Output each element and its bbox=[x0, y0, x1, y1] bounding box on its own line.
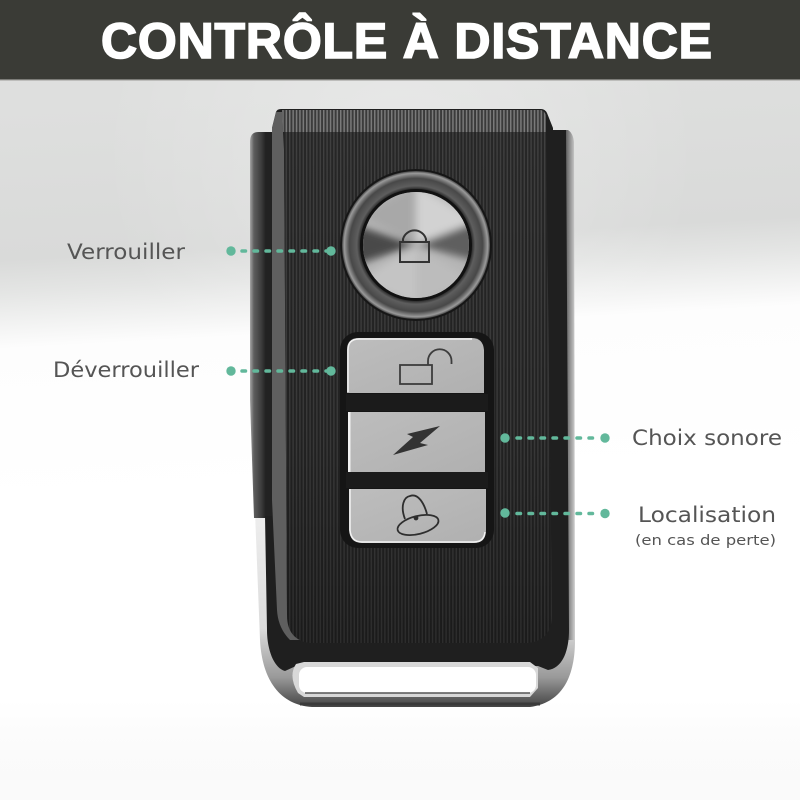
icon: lightning bolt bbox=[393, 426, 440, 455]
bar bbox=[346, 472, 488, 488]
icon: padlock open bbox=[400, 349, 452, 384]
metal disc bbox=[363, 192, 469, 298]
shell left bevel bbox=[272, 112, 300, 640]
remote control bbox=[250, 109, 575, 707]
callout: Choix sonore bbox=[500, 426, 782, 451]
callout: Choix sonore: Choix sonore bbox=[632, 426, 782, 451]
bell button bbox=[349, 489, 486, 543]
round button bbox=[340, 169, 492, 321]
callout: Localisation: Localisation bbox=[638, 503, 776, 528]
sound button bbox=[348, 412, 485, 472]
icon: bell bbox=[395, 495, 441, 539]
face lower shading bbox=[284, 132, 552, 643]
three-button block bbox=[340, 332, 494, 548]
chrome slot bbox=[292, 662, 540, 704]
left side rail bbox=[250, 132, 276, 518]
unlock button bbox=[347, 338, 484, 393]
callout: Déverrouiller: Déverrouiller bbox=[53, 358, 199, 383]
callout: Localisation: (en cas de perte) bbox=[635, 533, 776, 549]
callout: Déverrouiller bbox=[53, 358, 336, 383]
right side rail bbox=[560, 130, 575, 640]
callout: Verrouiller bbox=[67, 240, 336, 265]
header banner bbox=[0, 0, 800, 81]
bar bbox=[346, 394, 488, 411]
title: CONTRÔLE À DISTANCE bbox=[101, 12, 712, 69]
black body shell bbox=[265, 109, 569, 671]
callout: Verrouiller: Verrouiller bbox=[67, 240, 185, 265]
ribbed top edge bbox=[282, 110, 546, 132]
ribbed face bbox=[284, 132, 552, 643]
chrome lower casing bbox=[255, 510, 575, 707]
callout: Localisation bbox=[500, 503, 776, 549]
icon: padlock closed bbox=[400, 230, 429, 262]
